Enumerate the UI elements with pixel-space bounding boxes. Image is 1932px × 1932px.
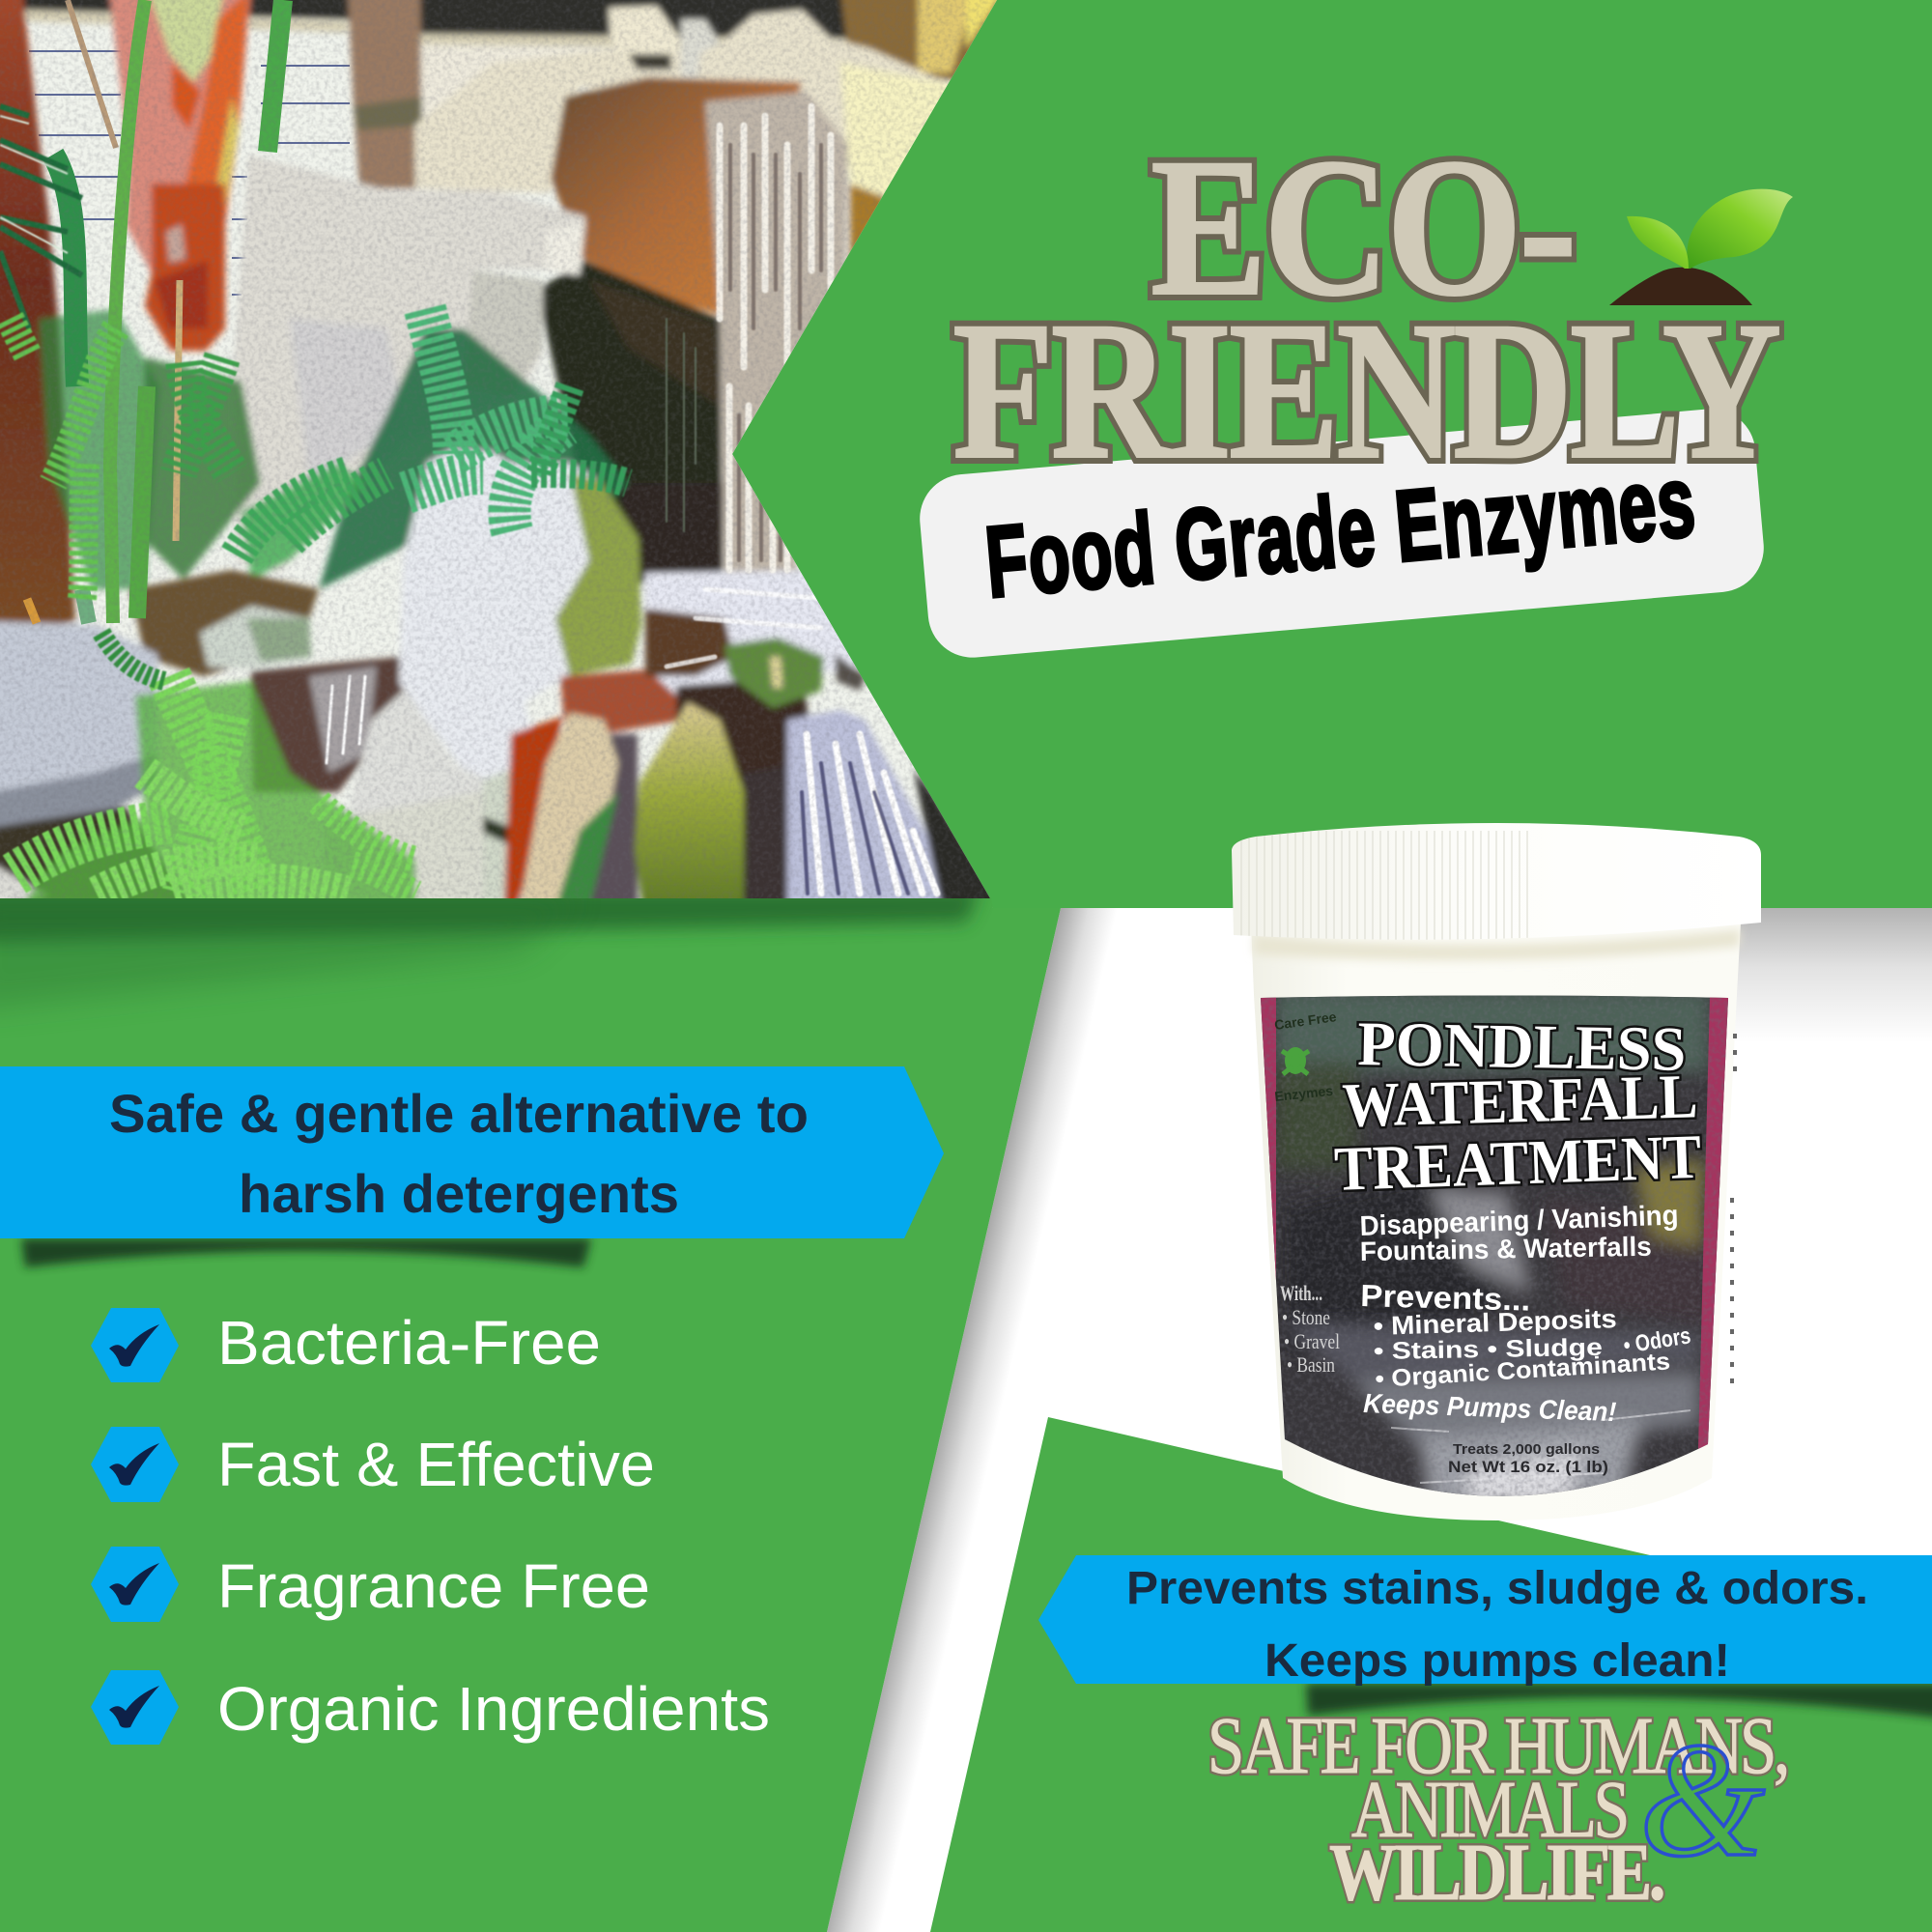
waterfall right: [781, 707, 947, 898]
label with list: With...: [1280, 1281, 1322, 1305]
label body copy: [1359, 1200, 1692, 1427]
white pill: food grade enzymes: [916, 406, 1768, 661]
label frog logo: Care Free: [1273, 1009, 1338, 1033]
fern fronds left: [10, 319, 116, 599]
label heading: TREATMENT: [1333, 1122, 1702, 1205]
title: eco-friendly: [952, 118, 1779, 500]
item: fragrance free: Fragrance Free: [217, 1551, 650, 1621]
water streaks: [327, 106, 937, 894]
banner shadow left: [21, 1238, 591, 1267]
label small print: Net Wt 16 oz. (1 lb): [1448, 1458, 1608, 1476]
item: organic ingredients: Organic Ingredients: [217, 1674, 770, 1744]
title: eco-friendly: FRIENDLY: [952, 281, 1779, 500]
label body copy: • Odors: [1622, 1322, 1692, 1359]
waterfall: [705, 92, 848, 576]
left trunk: [0, 0, 75, 638]
leaf sprout icon: [1609, 189, 1793, 305]
jar lid: [1232, 823, 1761, 942]
item: bacteria-free: [91, 1308, 601, 1382]
label body copy: • Organic Contaminants: [1375, 1348, 1671, 1393]
label body copy: Prevents...: [1360, 1278, 1531, 1318]
tagline: safe for humans, animals and wildlife: WILDLIFE.: [1329, 1828, 1663, 1918]
banner: prevents stains: Prevents stains, sludge & odors.: [1126, 1563, 1868, 1614]
shadow beneath the photo: [0, 889, 980, 1009]
water pool: [645, 570, 860, 696]
center trunk and stick: [348, 0, 422, 188]
banner: prevents stains: Keeps pumps clean!: [1264, 1635, 1730, 1687]
label body copy: • Stains • Sludge: [1374, 1334, 1603, 1365]
label small print: Treats 2,000 gallons: [1453, 1441, 1600, 1458]
rock A: [520, 713, 618, 908]
green masses: [39, 309, 159, 589]
ampersand: &: [1639, 1709, 1765, 1890]
label heading: [1333, 1009, 1702, 1205]
banner: prevents stains: [1038, 1555, 1932, 1687]
label body copy: Fountains & Waterfalls: [1360, 1232, 1652, 1266]
tagline: safe for humans, animals and wildlife: ANIMALS: [1351, 1765, 1627, 1855]
item: bacteria-free: Bacteria-Free: [217, 1308, 601, 1378]
shadow of lower left panel on white: [827, 908, 1169, 1932]
middle debris and rock: [130, 570, 319, 676]
panel: lower right green: [930, 1417, 1932, 1932]
rock B: [635, 702, 744, 908]
big boulder: [233, 155, 585, 574]
bottom fern mass: [19, 681, 415, 908]
upper rock: [414, 10, 956, 193]
label body copy: Disappearing / Vanishing: [1359, 1200, 1679, 1242]
tagline: safe for humans, animals and wildlife: SAFE FOR HUMANS,: [1208, 1701, 1787, 1791]
panel: lower left green: [0, 896, 1061, 1932]
jar neck shading: [1254, 929, 1741, 960]
palm and ferns: [0, 106, 628, 894]
lower rocks: [344, 688, 519, 898]
label frog logo: [1273, 1009, 1338, 1104]
banner: safe and gentle: harsh detergents: [239, 1163, 679, 1224]
panel: top right green: [732, 0, 1932, 908]
label frog logo: Enzymes: [1274, 1083, 1334, 1104]
fern fronds center: [237, 473, 386, 555]
jar body: [1251, 923, 1741, 1520]
label with list: • Gravel: [1284, 1329, 1340, 1353]
stems and blades: [27, 0, 283, 623]
jar label: [1256, 990, 1739, 1550]
front boulder: [399, 448, 641, 789]
item: fast and effective: Fast & Effective: [217, 1430, 655, 1499]
tagline: safe for humans, animals and wildlife: WILDLIFE.: [1329, 1828, 1663, 1918]
title: eco-friendly: FRIENDLY: [952, 281, 1779, 500]
banner: safe and gentle: Safe & gentle alternative to: [109, 1083, 809, 1144]
title: eco-friendly: ECO-: [1151, 118, 1574, 337]
label body copy: Keeps Pumps Clean!: [1363, 1388, 1617, 1427]
banner shadow right: [1306, 1684, 1932, 1719]
list: product benefits: [91, 1308, 770, 1745]
label with list: • Basin: [1287, 1352, 1335, 1377]
label heading: PONDLESS: [1357, 1009, 1687, 1085]
tagline: safe for humans, animals and wildlife: SAFE FOR HUMANS,: [1208, 1701, 1787, 1791]
jar product: [1232, 823, 1761, 1550]
fern fronds bottom: [14, 676, 256, 894]
title: eco-friendly: ECO-: [1151, 118, 1574, 337]
photo: rock garden waterfall: [0, 0, 1005, 908]
green wet rock: [724, 638, 824, 708]
label with list: • Stone: [1282, 1305, 1330, 1329]
red tree: [104, 0, 257, 272]
bottom left boulder: [0, 621, 157, 831]
label with list: [1280, 1281, 1340, 1377]
beam and top structures: [19, 0, 850, 39]
cave: [537, 261, 723, 584]
tagline: safe for humans, animals and wildlife: [1208, 1701, 1787, 1918]
shadow strip under top green panel: [1729, 907, 1932, 1042]
banner: safe and gentle: [0, 1066, 944, 1238]
tagline: safe for humans, animals and wildlife: ANIMALS: [1351, 1765, 1627, 1855]
label small print: [1448, 1441, 1608, 1476]
label body copy: • Mineral Deposits: [1373, 1304, 1617, 1341]
label heading: WATERFALL: [1342, 1062, 1698, 1141]
